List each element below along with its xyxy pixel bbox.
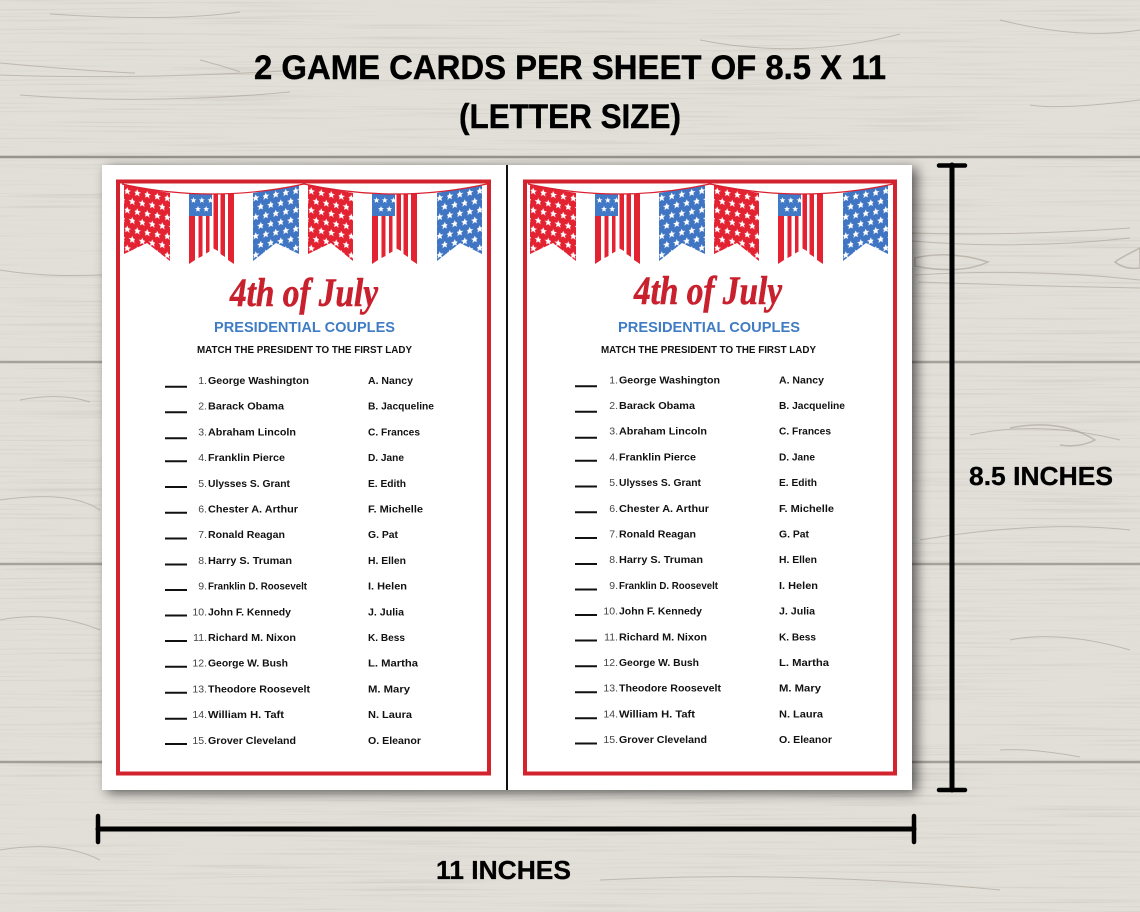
first lady names: N. Laura <box>368 709 412 721</box>
president names: George W. Bush <box>619 657 699 669</box>
president names: Barack Obama <box>208 401 284 413</box>
president names <box>208 375 311 747</box>
president names: Harry S. Truman <box>208 555 292 567</box>
numbers: 8. <box>609 554 618 566</box>
first lady names <box>368 375 434 747</box>
president names: Grover Cleveland <box>208 735 296 747</box>
panel: right game card <box>525 182 895 774</box>
president names: Ulysses S. Grant <box>208 478 290 490</box>
president names: William H. Taft <box>619 708 696 720</box>
president names: George W. Bush <box>208 658 288 670</box>
first lady names: J. Julia <box>779 606 815 618</box>
president names: Richard M. Nixon <box>208 632 296 644</box>
numbers: 13. <box>192 683 207 695</box>
first lady names: H. Ellen <box>368 555 406 567</box>
first lady names: B. Jacqueline <box>368 401 434 413</box>
numbers: 9. <box>609 580 618 592</box>
president names: Harry S. Truman <box>619 554 703 566</box>
first lady names: J. Julia <box>368 606 404 618</box>
first lady names: L. Martha <box>368 658 418 670</box>
first lady names: F. Michelle <box>368 504 423 516</box>
first lady names: I. Helen <box>779 580 818 592</box>
script title: 4th of July <box>633 268 782 313</box>
first lady names: A. Nancy <box>368 375 413 387</box>
numbers: 1. <box>609 374 618 386</box>
answer blanks <box>165 387 187 744</box>
president names: Theodore Roosevelt <box>208 683 311 695</box>
numbers: 9. <box>198 581 207 593</box>
president names: Franklin D. Roosevelt <box>208 581 307 593</box>
first lady names: C. Frances <box>368 426 420 438</box>
president names: Abraham Lincoln <box>619 426 707 438</box>
instructions: MATCH THE PRESIDENT TO THE FIRST LADY <box>601 344 816 356</box>
height dimension arrow <box>939 165 965 790</box>
numbers: 4. <box>198 452 207 464</box>
numbers: 14. <box>192 709 207 721</box>
heading: (LETTER SIZE) <box>459 98 681 136</box>
numbers: 1. <box>198 375 207 387</box>
first lady names: D. Jane <box>368 452 404 464</box>
first lady names: G. Pat <box>779 528 809 540</box>
numbers: 11. <box>604 631 618 643</box>
numbers: 15. <box>603 734 618 746</box>
numbers: 13. <box>603 683 618 695</box>
president names: Chester A. Arthur <box>208 504 298 516</box>
numbers: 3. <box>198 426 207 438</box>
first lady names: G. Pat <box>368 529 398 541</box>
bunting banner <box>122 184 487 264</box>
panel: left game card <box>118 182 489 774</box>
president names <box>619 374 722 746</box>
first lady names: N. Laura <box>779 708 823 720</box>
numbers: 14. <box>603 708 618 720</box>
first lady names: D. Jane <box>779 451 815 463</box>
first lady names: K. Bess <box>368 632 405 644</box>
subtitle: PRESIDENTIAL COUPLES <box>214 319 395 336</box>
numbers: 15. <box>192 735 207 747</box>
answer blanks <box>575 386 597 744</box>
script title: 4th of July <box>229 270 378 315</box>
first lady names: K. Bess <box>779 631 816 643</box>
subtitle: PRESIDENTIAL COUPLES <box>618 319 800 336</box>
first lady names: E. Edith <box>368 478 406 490</box>
numbers: 10. <box>603 606 618 618</box>
president names: Ronald Reagan <box>619 528 696 540</box>
president names: George Washington <box>208 375 309 387</box>
first lady names: M. Mary <box>368 683 410 695</box>
numbers: 2. <box>198 401 207 413</box>
first lady names: C. Frances <box>779 426 831 438</box>
first lady names: M. Mary <box>779 683 821 695</box>
numbers <box>192 375 207 747</box>
president names: Grover Cleveland <box>619 734 707 746</box>
president names: Abraham Lincoln <box>208 426 296 438</box>
sheet of paper <box>102 165 912 790</box>
numbers: 6. <box>609 503 618 515</box>
numbers <box>603 374 618 746</box>
first lady names <box>779 374 845 746</box>
numbers: 7. <box>609 528 618 540</box>
numbers: 12. <box>603 657 618 669</box>
president names: Barack Obama <box>619 400 695 412</box>
card border <box>118 182 489 774</box>
first lady names: B. Jacqueline <box>779 400 845 412</box>
numbers: 7. <box>198 529 207 541</box>
numbers: 2. <box>609 400 618 412</box>
width label: 11 INCHES <box>436 855 571 885</box>
numbers: 10. <box>192 606 207 618</box>
width dimension arrow <box>98 816 914 842</box>
numbers: 4. <box>609 451 618 463</box>
bunting banner <box>528 184 893 264</box>
numbers: 5. <box>609 477 618 489</box>
numbers: 12. <box>192 658 207 670</box>
heading <box>254 49 886 136</box>
numbers: 6. <box>198 504 207 516</box>
first lady names: E. Edith <box>779 477 817 489</box>
president names: Richard M. Nixon <box>619 631 707 643</box>
first lady names: I. Helen <box>368 581 407 593</box>
president names: Chester A. Arthur <box>619 503 709 515</box>
first lady names: L. Martha <box>779 657 829 669</box>
first lady names: O. Eleanor <box>368 735 421 747</box>
height label: 8.5 INCHES <box>969 461 1113 491</box>
president names: Theodore Roosevelt <box>619 683 722 695</box>
president names: Franklin Pierce <box>619 451 696 463</box>
card border <box>525 182 895 774</box>
president names: Ronald Reagan <box>208 529 285 541</box>
president names: George Washington <box>619 374 720 386</box>
president names: Franklin Pierce <box>208 452 285 464</box>
numbers: 3. <box>609 426 618 438</box>
president names: John F. Kennedy <box>208 606 291 618</box>
president names: John F. Kennedy <box>619 606 702 618</box>
first lady names: A. Nancy <box>779 374 824 386</box>
numbers: 11. <box>193 632 207 644</box>
heading: 2 GAME CARDS PER SHEET OF 8.5 X 11 <box>254 49 886 87</box>
president names: Ulysses S. Grant <box>619 477 701 489</box>
president names: William H. Taft <box>208 709 285 721</box>
instructions: MATCH THE PRESIDENT TO THE FIRST LADY <box>197 344 412 356</box>
first lady names: O. Eleanor <box>779 734 832 746</box>
first lady names: F. Michelle <box>779 503 834 515</box>
numbers: 5. <box>198 478 207 490</box>
first lady names: H. Ellen <box>779 554 817 566</box>
president names: Franklin D. Roosevelt <box>619 580 718 592</box>
numbers: 8. <box>198 555 207 567</box>
